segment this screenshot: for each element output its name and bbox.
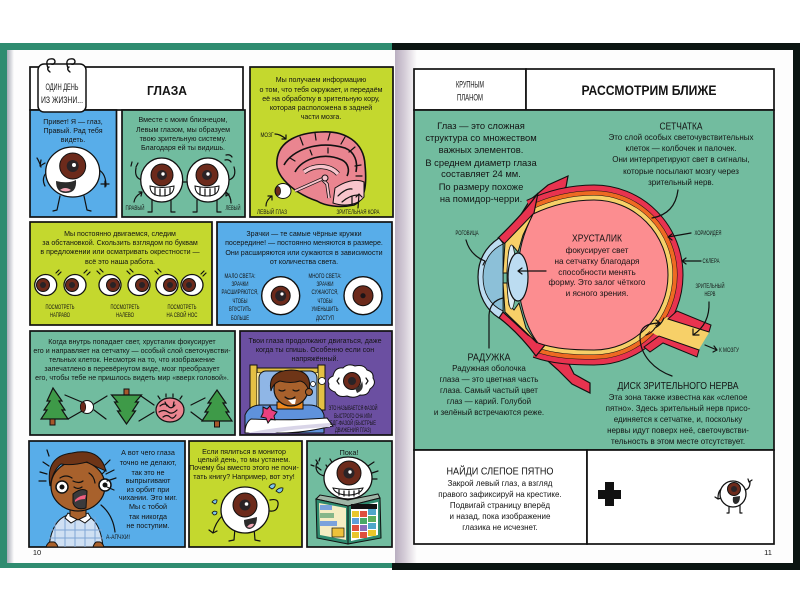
text: lens focus: тельных клеток. Несмотря на то, что изображение bbox=[49, 356, 215, 364]
panel: right page header tag bbox=[414, 69, 526, 110]
text: lens: на сетчатку благодаря bbox=[555, 257, 639, 266]
text: instructions: глазика не исчезнет. bbox=[462, 523, 538, 532]
label: look left: НАЛЕВО bbox=[116, 312, 134, 319]
vitreous body bbox=[518, 200, 668, 350]
text: twin eyes: Вместе с моим близнецом, bbox=[138, 116, 228, 124]
panel: blind spot text bbox=[414, 450, 587, 544]
label: optic nerve bbox=[693, 281, 725, 335]
label: look right: ПОСМОТРЕТЬ bbox=[46, 304, 74, 311]
text: lens: и ясного зрения. bbox=[566, 289, 628, 298]
text: lens: фокусирует свет bbox=[566, 246, 629, 255]
optic disc bump bbox=[646, 318, 664, 335]
text: tired eye: тать книгу? Например, вот эту! bbox=[193, 473, 295, 481]
label: bright light: ЧТОБЫ bbox=[318, 298, 333, 305]
icon: spiral rings bbox=[47, 59, 75, 72]
text: greeting: видеть. bbox=[61, 136, 85, 144]
label: cornea bbox=[456, 230, 485, 265]
text: iris: глаз — карий. Голубой bbox=[447, 397, 531, 406]
text: pupils: Они расширяются или сужаются в зависимости bbox=[225, 249, 383, 257]
text: iris: глаза — это цветная часть bbox=[440, 375, 538, 384]
caption: REM: БЫСТРОГО СНА ИЛИ bbox=[334, 414, 372, 420]
label: to brain: К МОЗГУ bbox=[719, 347, 740, 354]
right page bbox=[395, 50, 793, 563]
icon: inverted tree bbox=[112, 389, 142, 424]
text: brain info: которая расположена в задней bbox=[270, 104, 372, 112]
text: sleep: Твои глаза продолжают двигаться, даже bbox=[248, 337, 382, 345]
icon: eye on book bbox=[311, 457, 381, 544]
text: lens focus: запечатлено в перевёрнутом виде, мозг преобразует bbox=[44, 365, 220, 373]
icon: plus bbox=[598, 482, 621, 506]
arrow: sneeze bbox=[101, 505, 115, 532]
text: sleep: когда ты спишь. Особенно если сон bbox=[256, 346, 374, 354]
heading: retina: СЕТЧАТКА bbox=[660, 120, 702, 132]
text: twin eyes: Левым глазом, мы образуем bbox=[136, 126, 230, 134]
label: low light: МАЛО СВЕТА: bbox=[224, 273, 256, 280]
label: optic nerve: НЕРВ bbox=[704, 291, 716, 298]
iris leader bbox=[489, 298, 503, 348]
text: pupils: от количества света. bbox=[270, 258, 338, 266]
text: eye movement: за обстановкой. Скользить взглядом по буквам bbox=[42, 239, 198, 247]
panel: eye anatomy bbox=[414, 110, 774, 450]
text: brain info: её на обработку в зрительную кору, bbox=[262, 95, 380, 103]
text: brain info: части мозга. bbox=[301, 113, 341, 121]
panel: pupils bbox=[217, 222, 392, 325]
label: choroid: ХОРИОИДЕЯ bbox=[694, 230, 722, 237]
label: low light: ЧТОБЫ bbox=[232, 298, 248, 305]
icon: thought bubble bbox=[310, 365, 374, 397]
sclera front bbox=[498, 193, 538, 244]
diagram: eye cross-section bbox=[478, 176, 711, 393]
icon: small eye bbox=[80, 400, 94, 414]
text: pupils: посередине! — постоянно меняются в размере. bbox=[225, 239, 383, 247]
panel: hello eye bbox=[30, 110, 116, 217]
caption: REM: ДВИЖЕНИЯ ГЛАЗ) bbox=[335, 428, 371, 434]
panel: upside-down image bbox=[30, 331, 235, 435]
text: instructions: Подвигай страницу вперёд bbox=[450, 501, 550, 510]
label: low light: РАСШИРЯЮТСЯ, bbox=[222, 289, 259, 296]
label: visual cortex: ЗРИТЕЛЬНАЯ КОРА bbox=[336, 209, 380, 216]
text: intro: важных элементов. bbox=[439, 144, 523, 155]
label: right: ПРАВЫЙ bbox=[126, 203, 145, 212]
rays: in bbox=[65, 395, 107, 419]
text: bye: Пока! bbox=[340, 448, 358, 457]
text: intro: составляет 24 мм. bbox=[441, 168, 521, 179]
text: tired eye: Почему бы вместо этого не почи- bbox=[189, 464, 299, 472]
label: look left: ПОСМОТРЕТЬ bbox=[110, 304, 140, 311]
arrows: brain labels bbox=[266, 134, 362, 208]
rays: out bbox=[139, 396, 205, 421]
text: close-up: ПЛАНОМ bbox=[457, 92, 483, 104]
icon: tree upright bbox=[202, 390, 232, 427]
retina leader bbox=[652, 190, 678, 218]
panel: right page title bbox=[526, 69, 774, 110]
text: close-up: КРУПНЫМ bbox=[456, 80, 484, 90]
text: iris: Радужная оболочка bbox=[452, 364, 526, 373]
caption: REM: БДГ-ФАЗОЙ (БЫСТРЫЕ bbox=[330, 419, 376, 427]
label: left eye: ЛЕВЫЙ ГЛАЗ bbox=[257, 207, 287, 216]
lens capsule bbox=[507, 245, 516, 309]
icon: constricted pupil bbox=[344, 277, 382, 315]
text: greeting: Правый. Рад тебя bbox=[43, 127, 103, 135]
text: one day: ОДИН ДЕНЬ bbox=[46, 82, 79, 92]
panel: REM sleep bbox=[240, 331, 392, 435]
label: look at nose: ПОСМОТРЕТЬ bbox=[168, 304, 196, 311]
label: sclera: СКЛЕРА bbox=[702, 258, 720, 265]
panel: tired eye bbox=[189, 441, 302, 547]
text: intro: По размеру похоже bbox=[439, 181, 523, 192]
text: intro: структура со множеством bbox=[425, 132, 537, 143]
icon: brain bbox=[275, 132, 366, 206]
page number 10: 10 bbox=[33, 548, 41, 557]
text: iris: глаза. Самый частый цвет bbox=[440, 386, 538, 395]
icons: six looking eyes bbox=[35, 269, 206, 296]
text: eye movement: в предложении или осматривать окрестности — bbox=[40, 248, 201, 256]
text: retina: Они интерпретируют свет в сигналы, bbox=[612, 155, 750, 164]
text: optic disc: нервы идут поверх неё, светочувстви- bbox=[607, 426, 749, 435]
text: optic disc: Эта зона также известна как «слепое bbox=[609, 393, 748, 402]
text: optic disc: пятно». Здесь зрительный нерв присо- bbox=[606, 404, 751, 413]
text: retina: которые посылают мозгу через bbox=[623, 167, 739, 176]
text: brain info: о том, что тебя окружает, и передаём bbox=[259, 86, 383, 94]
label: low light: ЗРАЧКИ bbox=[232, 281, 249, 288]
lens bbox=[508, 253, 528, 301]
label: bright light: МНОГО СВЕТА: bbox=[308, 273, 342, 280]
text: lens focus: его, чтобы тебе не пришлось видеть мир «вверх головой». bbox=[35, 374, 229, 382]
label: bright light: СУЖАЮТСЯ, bbox=[312, 289, 339, 296]
caption: REM: ЭТО НАЗЫВАЕТСЯ ФАЗОЙ bbox=[328, 404, 378, 412]
label: look at nose: НА СВОЙ НОС bbox=[166, 310, 198, 319]
text: optic disc: единяется к сетчатке, и, поскольку bbox=[614, 415, 742, 424]
text: retina: Это слой особых светочувствительных bbox=[608, 133, 754, 142]
label: sneeze: А-АПЧХИ! bbox=[106, 534, 130, 541]
text: brain info: Мы получаем информацию bbox=[276, 76, 367, 84]
label: low light: ВПУСТИТЬ bbox=[229, 306, 251, 313]
text: sleep: напряжённый. bbox=[292, 355, 339, 363]
text: instructions: и назад, пока изображение bbox=[450, 512, 551, 521]
text: optic disc: тельность в этом месте отсутствует. bbox=[611, 437, 745, 446]
text: sneeze: так это не bbox=[131, 468, 165, 477]
heading: lens: ХРУСТАЛИК bbox=[572, 232, 623, 244]
bottom muscle bbox=[530, 345, 590, 393]
text: lens focus: его и направляет на сетчатку — особый слой светочувстви- bbox=[33, 347, 231, 355]
text: sneeze: Мы с тобой bbox=[129, 502, 167, 511]
text: intro: В среднем диаметр глаза bbox=[425, 157, 537, 168]
text: sneeze: точно не делают, bbox=[120, 458, 176, 467]
text: one day: ИЗ ЖИЗНИ... bbox=[41, 95, 83, 105]
icon: brain small bbox=[156, 394, 184, 422]
text: retina: зрительный нерв. bbox=[648, 178, 714, 187]
label: to brain bbox=[705, 345, 740, 354]
text: lens focus: Когда внутрь попадает свет, хрусталик фокусирует bbox=[48, 338, 216, 346]
text: twin eyes: твою зрительную систему. bbox=[140, 135, 226, 143]
label: left: ЛЕВЫЙ bbox=[226, 203, 241, 212]
label: bright light: УМЕНЬШИТЬ bbox=[312, 306, 338, 313]
text: intro: Глаз — это сложная bbox=[437, 120, 525, 131]
panel: brain bbox=[250, 67, 393, 217]
panel: eye movement bbox=[30, 222, 212, 325]
panel: sneeze bbox=[29, 441, 185, 547]
text: iris: и зелёный встречаются реже. bbox=[434, 408, 544, 417]
icon: dilated pupil bbox=[262, 277, 300, 315]
optic disc leader bbox=[640, 320, 672, 376]
panel: goodbye bbox=[307, 441, 392, 547]
label: low light: БОЛЬШЕ bbox=[231, 315, 249, 322]
text: pupils: Зрачки — те самые чёрные кружки bbox=[246, 230, 362, 238]
text: twin eyes: Благодаря ей ты видишь. bbox=[141, 144, 225, 152]
icon: waving eye bbox=[37, 147, 109, 211]
heading: Глаза: ГЛАЗА bbox=[147, 83, 188, 98]
text: eye movement: всё это наша работа. bbox=[85, 258, 155, 266]
text: sneeze: так никогда bbox=[129, 512, 167, 521]
arrows: labels bbox=[134, 192, 231, 203]
left page bbox=[7, 50, 395, 563]
label: optic nerve: ЗРИТЕЛЬНЫЙ bbox=[696, 281, 725, 290]
label: look right: НАПРАВО bbox=[50, 312, 70, 319]
notebook tag bbox=[38, 59, 86, 112]
icon: tired eye bbox=[209, 484, 283, 541]
heading: find blind spot: НАЙДИ СЛЕПОЕ ПЯТНО bbox=[446, 464, 554, 478]
text: instructions: правого зафиксируй на крестике. bbox=[438, 490, 562, 499]
icon: left eye bbox=[187, 155, 235, 212]
heading: iris: РАДУЖКА bbox=[468, 352, 510, 364]
label: choroid bbox=[668, 230, 722, 240]
label: sclera bbox=[682, 258, 720, 265]
text: sneeze: не поступим. bbox=[126, 521, 170, 530]
illustration: sneezing boy bbox=[39, 450, 116, 547]
heading: optic disc: ДИСК ЗРИТЕЛЬНОГО НЕРВА bbox=[618, 380, 738, 392]
text: instructions: Закрой левый глаз, а взгляд bbox=[448, 479, 553, 488]
panel: twin eyes bbox=[122, 110, 245, 217]
label: bright light: ДОСТУП bbox=[316, 315, 334, 322]
icon: right eye bbox=[131, 158, 187, 212]
illustration: sleeping child bbox=[245, 365, 333, 433]
text: tired eye: Если пялиться в монитор bbox=[202, 448, 286, 456]
panel: blind spot test bbox=[587, 450, 774, 544]
eye wall layers bbox=[533, 200, 668, 350]
text: sneeze: чихании. Это миг. bbox=[119, 493, 177, 502]
text: lens: форму. Это залог чёткого bbox=[549, 278, 646, 287]
panel: header Глаза bbox=[30, 67, 243, 110]
icon: small eye bbox=[715, 479, 752, 513]
text: retina: клеток — колбочек и палочек. bbox=[626, 144, 736, 153]
text: lens: способности менять bbox=[558, 268, 636, 277]
label: cornea: РОГОВИЦА bbox=[456, 230, 479, 237]
heading: closer look: РАССМОТРИМ БЛИЖЕ bbox=[582, 83, 716, 98]
text: sneeze: из орбит при bbox=[127, 485, 169, 494]
optic nerve bbox=[644, 311, 711, 357]
cornea bbox=[478, 238, 503, 318]
text: tired eye: целый день, то мы устанем. bbox=[198, 456, 290, 464]
icon: tree bbox=[41, 388, 68, 425]
label: brain: МОЗГ bbox=[260, 132, 274, 139]
text: eye movement: Мы постоянно двигаемся, следим bbox=[64, 230, 176, 238]
arrow: lens bbox=[518, 268, 546, 274]
text: greeting: Привет! Я — глаз, bbox=[43, 118, 103, 126]
text: intro: на помидор-черри. bbox=[440, 193, 522, 204]
ciliary body bbox=[503, 214, 533, 273]
page number 11: 11 bbox=[764, 548, 772, 557]
text: sneeze: А вот чего глаза bbox=[121, 448, 175, 457]
label: bright light: ЗРАЧКИ bbox=[316, 281, 334, 288]
top muscle bbox=[520, 176, 568, 216]
text: sneeze: выпрыгивают bbox=[126, 476, 171, 485]
